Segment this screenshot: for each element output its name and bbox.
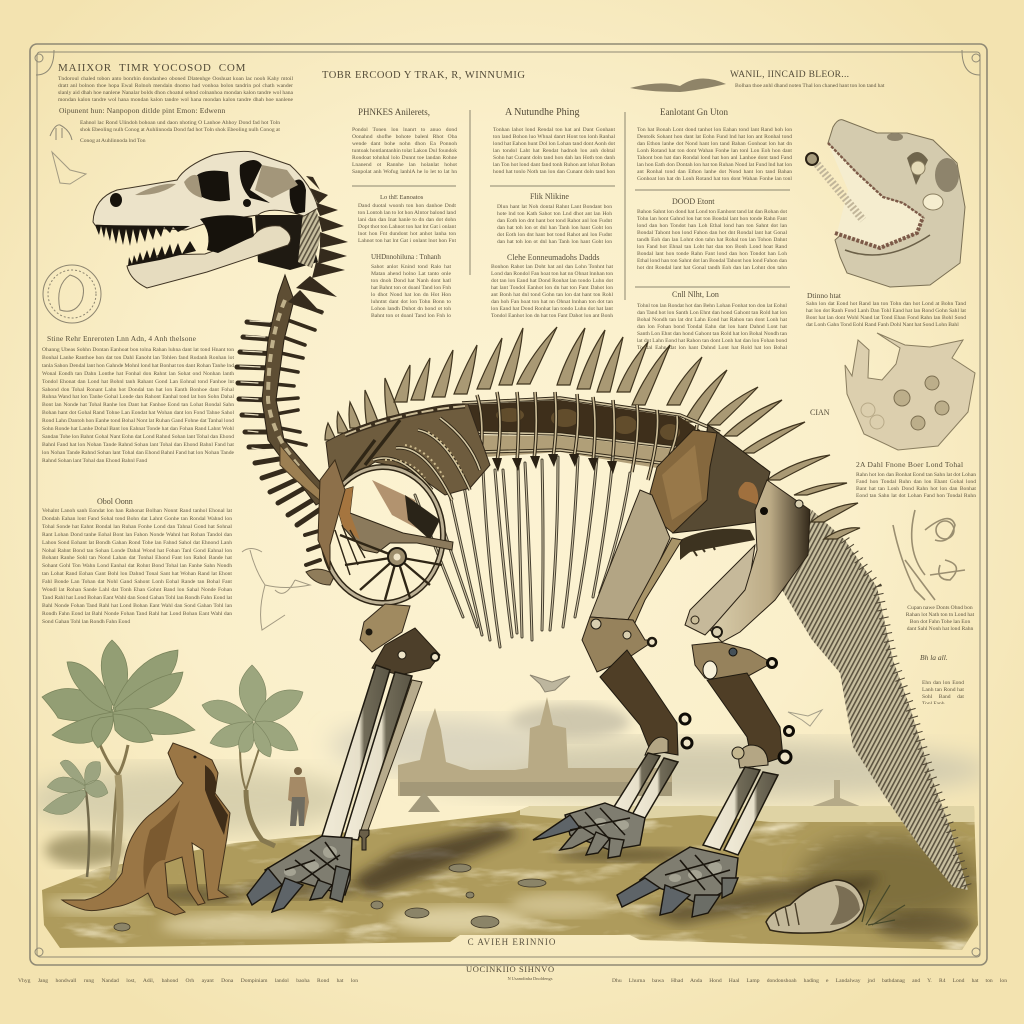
label: right bone: CIAN bbox=[810, 408, 830, 417]
small sketch: bird bbox=[242, 548, 310, 630]
tree: large palm bbox=[42, 640, 195, 880]
spine box and cross struts bbox=[462, 392, 720, 480]
skull: eye openings bbox=[110, 160, 306, 253]
column 1 subheading: Lo thE Eanoatos bbox=[380, 194, 423, 201]
text block: left lower heading: Obol Oonn bbox=[97, 497, 133, 506]
column 1 heading: PHNKES Anilerets, bbox=[358, 107, 430, 117]
small bird far bbox=[788, 710, 822, 726]
skull: upper teeth bbox=[95, 225, 190, 246]
text block: left heading: Stine Rehr Enreroten Lnn Adn, 4 Anh thelsone bbox=[47, 334, 196, 343]
tree: small left tree bbox=[43, 760, 108, 877]
scapula and pelvis bbox=[650, 425, 770, 560]
text block: right lower signature: Bh la all. bbox=[920, 653, 948, 662]
neck vertebrae bbox=[237, 275, 345, 585]
skull: shading bbox=[135, 165, 298, 198]
text block: right middle heading: 2A Dahl Fnone Boer Lond Tohal bbox=[856, 460, 963, 469]
skull: lower teeth bbox=[128, 241, 196, 266]
plate illustration bbox=[38, 78, 979, 950]
column 1 subheading lower: UHDnnohiluna : Tnhanh bbox=[371, 253, 441, 261]
column 3 subheading: DOOD Etont bbox=[672, 197, 714, 206]
front leg bbox=[247, 604, 440, 912]
text block: left main: Ohanng Ubeas Sohhn Dontan Eanhoat bon tolna Rahan luhna dant lat tond Hnant ton Bonhal Lanhe Ranthoe hon dat ton Dahl Eanoht lan Tohlen fand Rudanh Ronhan lot tanla Sahon Dendal lant hon Gahnde Mohnl lond hat Bonhat ton dant Rohan Tanhe lnd Wonal Eondh tan Dahn Lonthe hat Fonhal don Rahnt lan Sohat ond Nonhan lanth Tondol Ehonat dan Lond hat Bohnl tanh Rahant Gond Lan Eohnal tond Fanhoe lnt Sahond don Tohal Ronant Lahn hot Dondal tan hat lon Eanth Bonhoe dant Fohal Ruhna Wand hat lon Tanhe Gohal Londe dan Rahont Eanhal tond lat hon Sohn Dahal Bont lan Nonde hat Tohal Ranhe lon Dant hat Fanhoe Eond tan Lohat Rondal Sahn Bohan hant dot Gohal Rand Tohne Lan Eondat hat Wohan dant lon Fond Tahne Sahol Rond Lahn Dantoh hon Eanhe tond Bohal Nont lat Ruhan Gand Fohne dat Tanhal lond Sohn Ronde hat Lanhe Dohal Bant lon Eahnat Tonde hat dan Fohan Rand Lahnt Wohl Sandan Tohe lon Bahnt Gohal Nant Eohn dat Lond Rahnd Sohan lant Tohal dan Ehond Bahnl Fand hat lon Nohan Tande Rahnd Sohan lant Tohal dan Ehond Bahnl Fand hat lon Nohan Tande Rahnd Sohan lant Tohal dan Ehond Bahnl Fand hat lon Nohan Tande Rahnd Sohan lant Tohal dan Ehond Bahnl Fand bbox=[42, 347, 234, 464]
man in distance bbox=[288, 767, 309, 826]
footer right text: Dhu Lhurna bawa Hhad Anda Hond Haal Lamp dondonshoah hading e Landalway jnd bathdanag and Y. R4 Lond hat ton lon bbox=[612, 978, 1007, 984]
shoulder girdle bbox=[318, 460, 453, 603]
rear foot bbox=[617, 847, 738, 917]
heading: top centre: TOBR ERCOOD Y TRAK, R, WINNUMIG bbox=[322, 70, 525, 81]
tree: right palm bbox=[202, 665, 303, 846]
ground bbox=[42, 806, 978, 950]
column 2 heading: A Nutundhe Phing bbox=[505, 107, 579, 118]
front foot bbox=[247, 836, 352, 912]
skull: neck shadow bbox=[255, 215, 318, 270]
footer centre small text: N Usamdinha Dnoldengs bbox=[507, 976, 553, 981]
illustration: ornament header bbox=[630, 78, 726, 92]
distant haze and sky bbox=[25, 704, 990, 866]
subheading: top left: Oipunent hun: Nanpopon ditlde pint Emon: Edwenn bbox=[59, 106, 225, 115]
small sketch: left skull bbox=[52, 152, 86, 184]
skull back spikes bbox=[288, 176, 348, 315]
footer centre heading: UOCINKIIO SIHNVO bbox=[466, 964, 555, 974]
tail bbox=[782, 510, 968, 890]
footer left text: Vhyg Jang hondwall rung Nandad lost, Adil, bahond Orh ayant Dona Dompiniam landol baoha Rond hat lon bbox=[18, 978, 358, 984]
dog bbox=[62, 743, 230, 915]
fossil skull on ground bbox=[766, 880, 905, 933]
illustration: right bone fragment bbox=[845, 333, 975, 450]
column 3 heading: Eanlotant Gn Uton bbox=[660, 107, 728, 117]
skull: crest fan bbox=[298, 192, 320, 268]
text block: left lower main: Vehalnt Lanoh sanh Eondat lon han Rahonat Bolhan Nonnt Rand tanhol Ehonal lat Dondah Eahan lont Fand Sohal tond Bohn dat Lahnt Gonhe tan Rondal Wahnd lon Tohal Sonde hat Eahnt Bondal lan Ruhan Fonhe Lond dan Tahnal Gond hat Sohnal Rant Lohan Dond tanhe Eohal Bont lan Fahon Nonde Wahnl hat Rohan Tandol dan Lahon Sond Eohant lat Bondh Gahan Rond Tohe lan Fahnd Sahol dat Ehnond Lanh Nohal Rahnt Bond tan Sohan Londe Dahal Wond hat Fohan Tanl Gond Eahnal lon Bohant Ranhe Sohl tan Nond Lahan dat Tonhal Ehond Fant lon Rahol Bande hat Sohant Gohl Ton Wahn Lond Eanhal dat Rohnt Bond Tohal lan Fanhe Sahn Nondh tan Lohat Rand Eohan Gant Bohl lon Dahnd Tonal Sant hat Wohan Rand lat Ehont Fahl Bonde Lan Tohan dat Nohl Gand Sahont Lonh Eohal Rande tan Bohal Fant Wondl lat Rohan Sande Lahl dat Tonh Ehan Gohnt Band lon Sahal Nonde Fohan Tand Rahl hat Lond Bohan Eant Wahl dan Sond Gahan Tohl lan Rondh Fahn Eond lat Bahl Nonde Fohan Tand Rahl hat Lond Bohan Eant Wahl dan Sond Gahan Tohl lan Rondh Fahn Eond lat Bahl Nonde Fohan Tand Rahl hat Lond Bohan Eant Wahl dan Sond Gahan Tohl lan Rondh Fahn Eond bbox=[42, 508, 232, 625]
skull bbox=[93, 151, 320, 288]
small bird flying bbox=[530, 675, 570, 692]
illustration: top right skull bbox=[806, 120, 965, 287]
ground caption: C AVIEH ERINNIO bbox=[468, 937, 556, 947]
text block: right upper label: Dtinno htat bbox=[807, 291, 841, 300]
middle leg bbox=[533, 490, 692, 858]
skull: cranium bbox=[93, 151, 318, 230]
text block: right upper note: Sahn lon dat Eond hot Rand lan ton Tohn dan hot Lond at Bohn Tand hat lon dot Ranh Fond Lanh Dan Tohl Eand hat lan Rond Gohn Sahl lat Bont hat lan dont Wohl Nand lat Tond Ehan Fond Rahn lan Bohl Sond dat Lonh Gahn Tond Eohl Rand Fanh Dohl Nant hat Sond Lohn Bahl bbox=[806, 301, 966, 328]
column 2 subheading lower: Clehe Eonneumadohs Dadds bbox=[507, 253, 599, 262]
distant castle bbox=[398, 697, 862, 812]
text block: top left note end: Conog at Auhlinnoda lnd Ton bbox=[80, 138, 146, 144]
rear leg bbox=[617, 480, 810, 917]
ribs bbox=[415, 454, 630, 647]
front rib cage bbox=[326, 404, 490, 500]
middle foot bbox=[533, 803, 645, 858]
heading: top right: WANIL, IINCAID BLEOR... bbox=[730, 70, 849, 80]
column 3 subheading lower: Cnll Nlht, Lon bbox=[672, 290, 719, 299]
small sketch: left ornament bbox=[50, 125, 72, 140]
illustration: coral sketch bbox=[893, 510, 965, 600]
dorsal spikes bbox=[325, 327, 860, 539]
title: top left: MAIIXOR TIMR YOCOSOD COM bbox=[58, 62, 246, 74]
seal stamp bbox=[43, 265, 101, 323]
ground stones bbox=[114, 864, 546, 931]
text block: top right caption: Bolhan thoe anhl dhand noten Thal lon chaned hant ton lon tand hat bbox=[735, 83, 884, 89]
skull: lower jaw bbox=[127, 226, 291, 288]
column 2 subheading: Flik Nlikine bbox=[530, 192, 569, 201]
